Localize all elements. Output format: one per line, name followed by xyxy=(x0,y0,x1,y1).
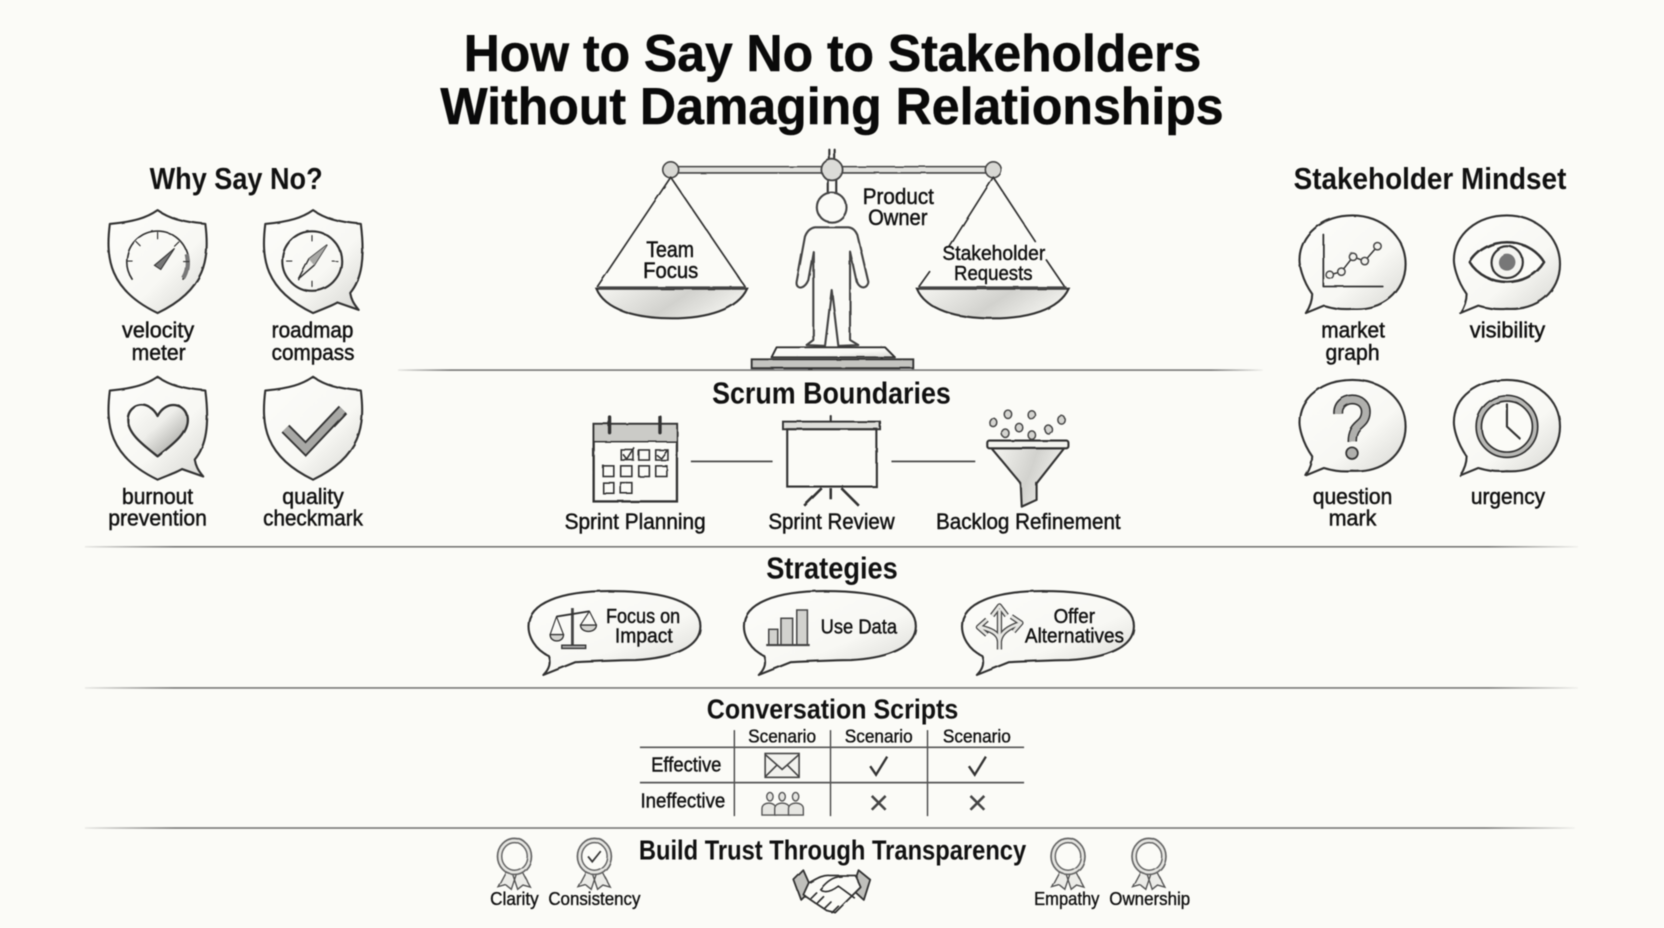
icon: right pan xyxy=(917,177,1069,318)
label: ownership: Ownership xyxy=(1109,889,1190,909)
icon: branching arrows xyxy=(978,606,1021,649)
table: scenario grid: Scenario xyxy=(943,727,1011,747)
label: team focus: Team xyxy=(646,237,694,262)
icon: calendar xyxy=(594,417,677,501)
label: question mark: question xyxy=(1313,484,1392,509)
label: stakeholder requests: Requests xyxy=(954,263,1033,285)
label: backlog refinement: Backlog Refinement xyxy=(936,509,1121,534)
label: velocity meter: velocity xyxy=(122,317,195,342)
label: market graph xyxy=(1321,317,1386,365)
callout: use data xyxy=(744,591,916,675)
label: market graph: market xyxy=(1321,317,1386,342)
label: product owner: Product xyxy=(863,184,935,209)
panel: build trust through transparency xyxy=(490,835,1190,913)
label: product owner xyxy=(863,184,935,230)
icon: scale beam xyxy=(663,150,1001,193)
callout: offer alternatives xyxy=(962,591,1134,675)
icon: visibility eye bubble xyxy=(1454,215,1560,313)
icon: empathy rosette xyxy=(1051,838,1085,889)
label: velocity meter: meter xyxy=(132,340,186,365)
icon: left pan xyxy=(596,177,747,318)
icon: handshake xyxy=(794,870,870,913)
label: roadmap compass xyxy=(272,317,354,365)
icon: balance scale xyxy=(550,608,596,648)
label: team focus: Focus xyxy=(643,258,698,283)
label: burnout prevention: prevention xyxy=(108,505,207,530)
icon: clarity rosette xyxy=(498,838,531,889)
icon: group of people xyxy=(762,792,803,815)
panel: stakeholder mindset xyxy=(1294,163,1566,530)
table: scenario grid: Ineffective xyxy=(640,790,725,812)
title: Without Damaging Relationships xyxy=(440,78,1224,136)
title: How to Say No to Stakeholders xyxy=(464,25,1201,83)
icon: cross xyxy=(970,796,984,810)
callout: offer alternatives: Offer xyxy=(1054,606,1095,628)
icon: roadmap compass shield xyxy=(264,210,363,313)
icon: cross xyxy=(872,796,886,810)
label: consistency: Consistency xyxy=(548,889,640,909)
label: team focus xyxy=(643,237,698,283)
heading: conversation scripts: Conversation Scripts xyxy=(707,693,958,724)
table: scenario grid: Scenario xyxy=(748,727,816,747)
callout: focus on impact: Impact xyxy=(615,626,673,648)
label: product owner: Owner xyxy=(868,205,928,230)
icon: envelope xyxy=(765,753,799,777)
label: question mark: mark xyxy=(1329,505,1377,530)
label: roadmap compass: compass xyxy=(272,340,354,365)
label: market graph: graph xyxy=(1325,340,1380,365)
arrow: connector planning to review xyxy=(691,461,773,462)
table: scenario grid: Effective xyxy=(651,755,721,777)
label: quality checkmark: quality xyxy=(282,484,345,509)
label: quality checkmark xyxy=(263,484,364,530)
table: scenario grid xyxy=(640,727,1024,816)
label: empathy: Empathy xyxy=(1034,889,1099,909)
arrow: connector review to refinement xyxy=(891,461,975,462)
icon: projector screen xyxy=(783,416,880,506)
icon: consistency rosette xyxy=(577,838,611,889)
icon: urgency clock bubble xyxy=(1454,380,1560,475)
icon: product owner figure xyxy=(752,193,913,368)
icon: quality checkmark shield xyxy=(264,377,362,480)
label: burnout prevention xyxy=(108,484,207,530)
label: urgency: urgency xyxy=(1471,484,1546,509)
label: quality checkmark: checkmark xyxy=(263,505,364,530)
icon: bar chart xyxy=(766,610,810,645)
title xyxy=(440,25,1224,136)
label: visibility: visibility xyxy=(1470,317,1546,342)
icon: check xyxy=(870,757,887,775)
label: roadmap compass: roadmap xyxy=(272,317,353,342)
heading: strategies: Strategies xyxy=(766,552,898,585)
table: scenario grid: Scenario xyxy=(845,727,913,747)
panel: conversation scripts xyxy=(640,693,1024,816)
icon: backlog funnel xyxy=(987,410,1068,507)
panel: why say no xyxy=(108,163,364,530)
callout: focus on impact xyxy=(528,591,700,675)
label: stakeholder requests xyxy=(942,243,1046,285)
heading: build trust: Build Trust Through Transparency xyxy=(639,835,1027,866)
label: velocity meter xyxy=(122,317,195,365)
icon: question mark bubble xyxy=(1299,380,1406,475)
icon: burnout prevention shield xyxy=(108,377,207,480)
icon: ownership rosette xyxy=(1132,838,1166,889)
label: clarity: Clarity xyxy=(490,889,539,909)
heading: stakeholder mindset: Stakeholder Mindset xyxy=(1294,163,1566,196)
heading: scrum boundaries: Scrum Boundaries xyxy=(712,377,951,410)
icon: check xyxy=(969,757,986,775)
callout: use data: Use Data xyxy=(821,616,898,638)
heading: why say no: Why Say No? xyxy=(150,163,323,196)
icon: market graph bubble xyxy=(1299,215,1406,313)
panel: balance scale with product owner xyxy=(596,150,1069,368)
callout: focus on impact: Focus on xyxy=(606,606,680,628)
icon: velocity meter shield xyxy=(108,210,207,313)
label: stakeholder requests: Stakeholder xyxy=(942,243,1046,265)
label: question mark xyxy=(1313,484,1392,530)
label: sprint review: Sprint Review xyxy=(768,509,895,534)
panel: scrum boundaries xyxy=(565,377,1121,534)
label: sprint planning: Sprint Planning xyxy=(565,509,706,534)
panel: strategies xyxy=(528,552,1134,675)
callout: offer alternatives: Alternatives xyxy=(1025,626,1124,648)
label: burnout prevention: burnout xyxy=(122,484,194,509)
